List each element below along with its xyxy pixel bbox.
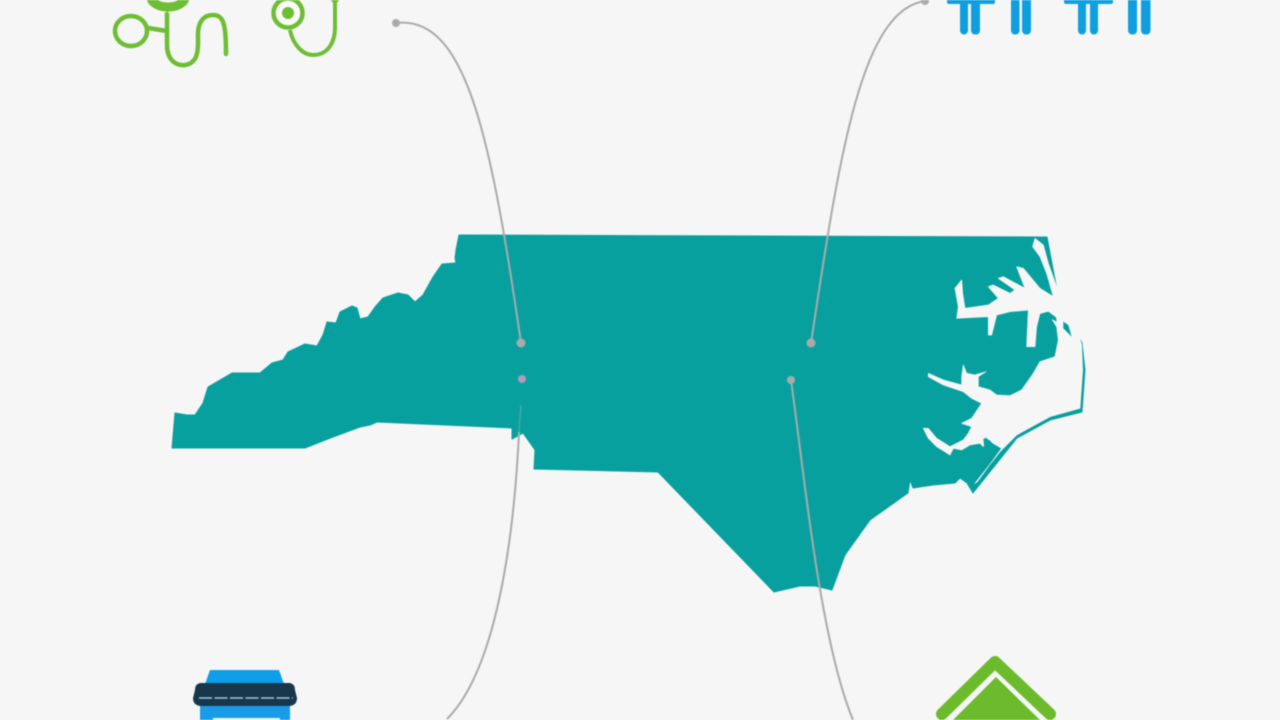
connector: house to map [787, 376, 853, 720]
connector: store to map [447, 375, 526, 719]
sounds and inlets [923, 238, 1083, 485]
connector: stethoscope to map [392, 19, 526, 348]
icon: stethoscope left [115, 0, 226, 65]
icon: store [193, 670, 297, 720]
icon: house [942, 662, 1050, 720]
icon: people [947, 0, 1150, 34]
map: North Carolina [172, 235, 1085, 592]
connector: people to map [806, 0, 929, 348]
icon: stethoscope right [274, 0, 341, 55]
